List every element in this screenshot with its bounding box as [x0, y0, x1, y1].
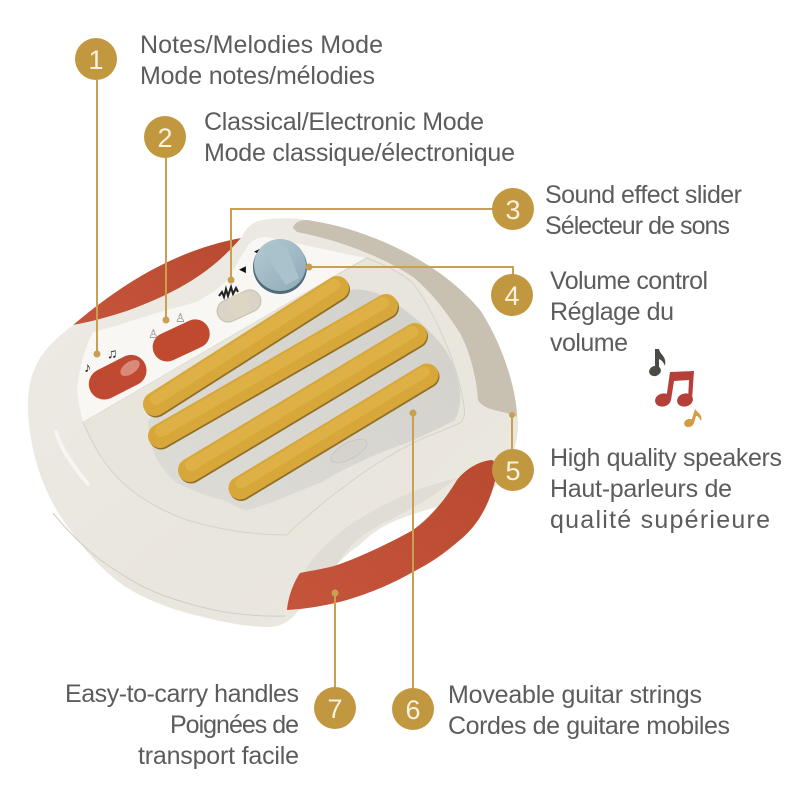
label 3: Sound effect slider — [545, 181, 742, 209]
callout 1 — [75, 31, 383, 358]
callout 7 — [65, 590, 356, 770]
icon: double notes: ♫ — [107, 345, 118, 361]
label 2: Mode classique/électronique — [204, 139, 515, 167]
label 5: Haut-parleurs de — [550, 475, 732, 503]
label 7: Poignées de — [170, 711, 299, 739]
label 4: Réglage du — [550, 298, 674, 326]
callout 6: 6 — [405, 695, 421, 725]
label 2: Classical/Electronic Mode — [204, 108, 484, 136]
label 1: Mode notes/mélodies — [140, 62, 375, 90]
callout 5 — [492, 412, 782, 534]
callout 7: 7 — [327, 694, 343, 724]
outer rim line — [53, 513, 285, 616]
icon: volume low: ◀ — [239, 264, 246, 274]
callout 2 — [144, 108, 515, 324]
callout 5: 5 — [505, 456, 521, 486]
label 6: Cordes de guitare mobiles — [448, 712, 730, 740]
label 4: volume — [550, 329, 628, 357]
label 7: Easy-to-carry handles — [65, 680, 299, 708]
lower band near handle — [303, 478, 457, 573]
knob: volume — [253, 239, 307, 294]
string 4 — [240, 372, 428, 490]
icon: volume high: ◀ — [279, 241, 286, 251]
callout 3: 3 — [505, 195, 521, 225]
guitar strings — [155, 285, 428, 490]
callout 3 — [228, 181, 742, 284]
gap inside handle — [337, 507, 437, 565]
string 3 — [190, 332, 416, 472]
label 5: High quality speakers — [550, 444, 782, 472]
handle: left — [73, 238, 241, 325]
callout 4 — [306, 264, 708, 357]
red beamed note — [654, 371, 694, 408]
button: classical/electronic mode — [148, 315, 215, 366]
icon: electronic guitar: ♙ — [175, 311, 186, 325]
label 6: Moveable guitar strings — [448, 681, 702, 709]
toy body — [28, 218, 518, 627]
icon: volume mid: ◀ — [254, 246, 261, 256]
string 1 — [155, 285, 338, 406]
callout 4: 4 — [504, 281, 520, 311]
music notes decoration — [648, 349, 701, 428]
handle: bottom — [287, 460, 497, 610]
icon: single note: ♪ — [84, 359, 91, 375]
string 2 — [160, 303, 387, 438]
label 4: Volume control — [550, 267, 708, 295]
label 1: Notes/Melodies Mode — [140, 31, 383, 59]
dark note — [648, 349, 665, 378]
icon: sound wave — [219, 287, 238, 297]
label 7: transport facile — [138, 742, 299, 770]
slider: sound effect — [214, 286, 264, 326]
label 5: qualité supérieure — [550, 506, 770, 534]
callout 6 — [392, 410, 730, 740]
callout 1: 1 — [88, 45, 104, 75]
icon: classical guitar: ♙ — [148, 327, 159, 341]
control panel — [77, 237, 365, 422]
brand oval — [328, 435, 370, 467]
button: notes/melodies mode — [83, 350, 152, 405]
label 3: Sélecteur de sons — [545, 212, 730, 240]
rim highlight — [56, 432, 88, 484]
inner plate — [83, 258, 465, 535]
gold note — [683, 409, 701, 428]
shaded area under strings — [148, 289, 460, 510]
callout 2: 2 — [157, 123, 173, 153]
speaker fabric — [293, 220, 517, 417]
